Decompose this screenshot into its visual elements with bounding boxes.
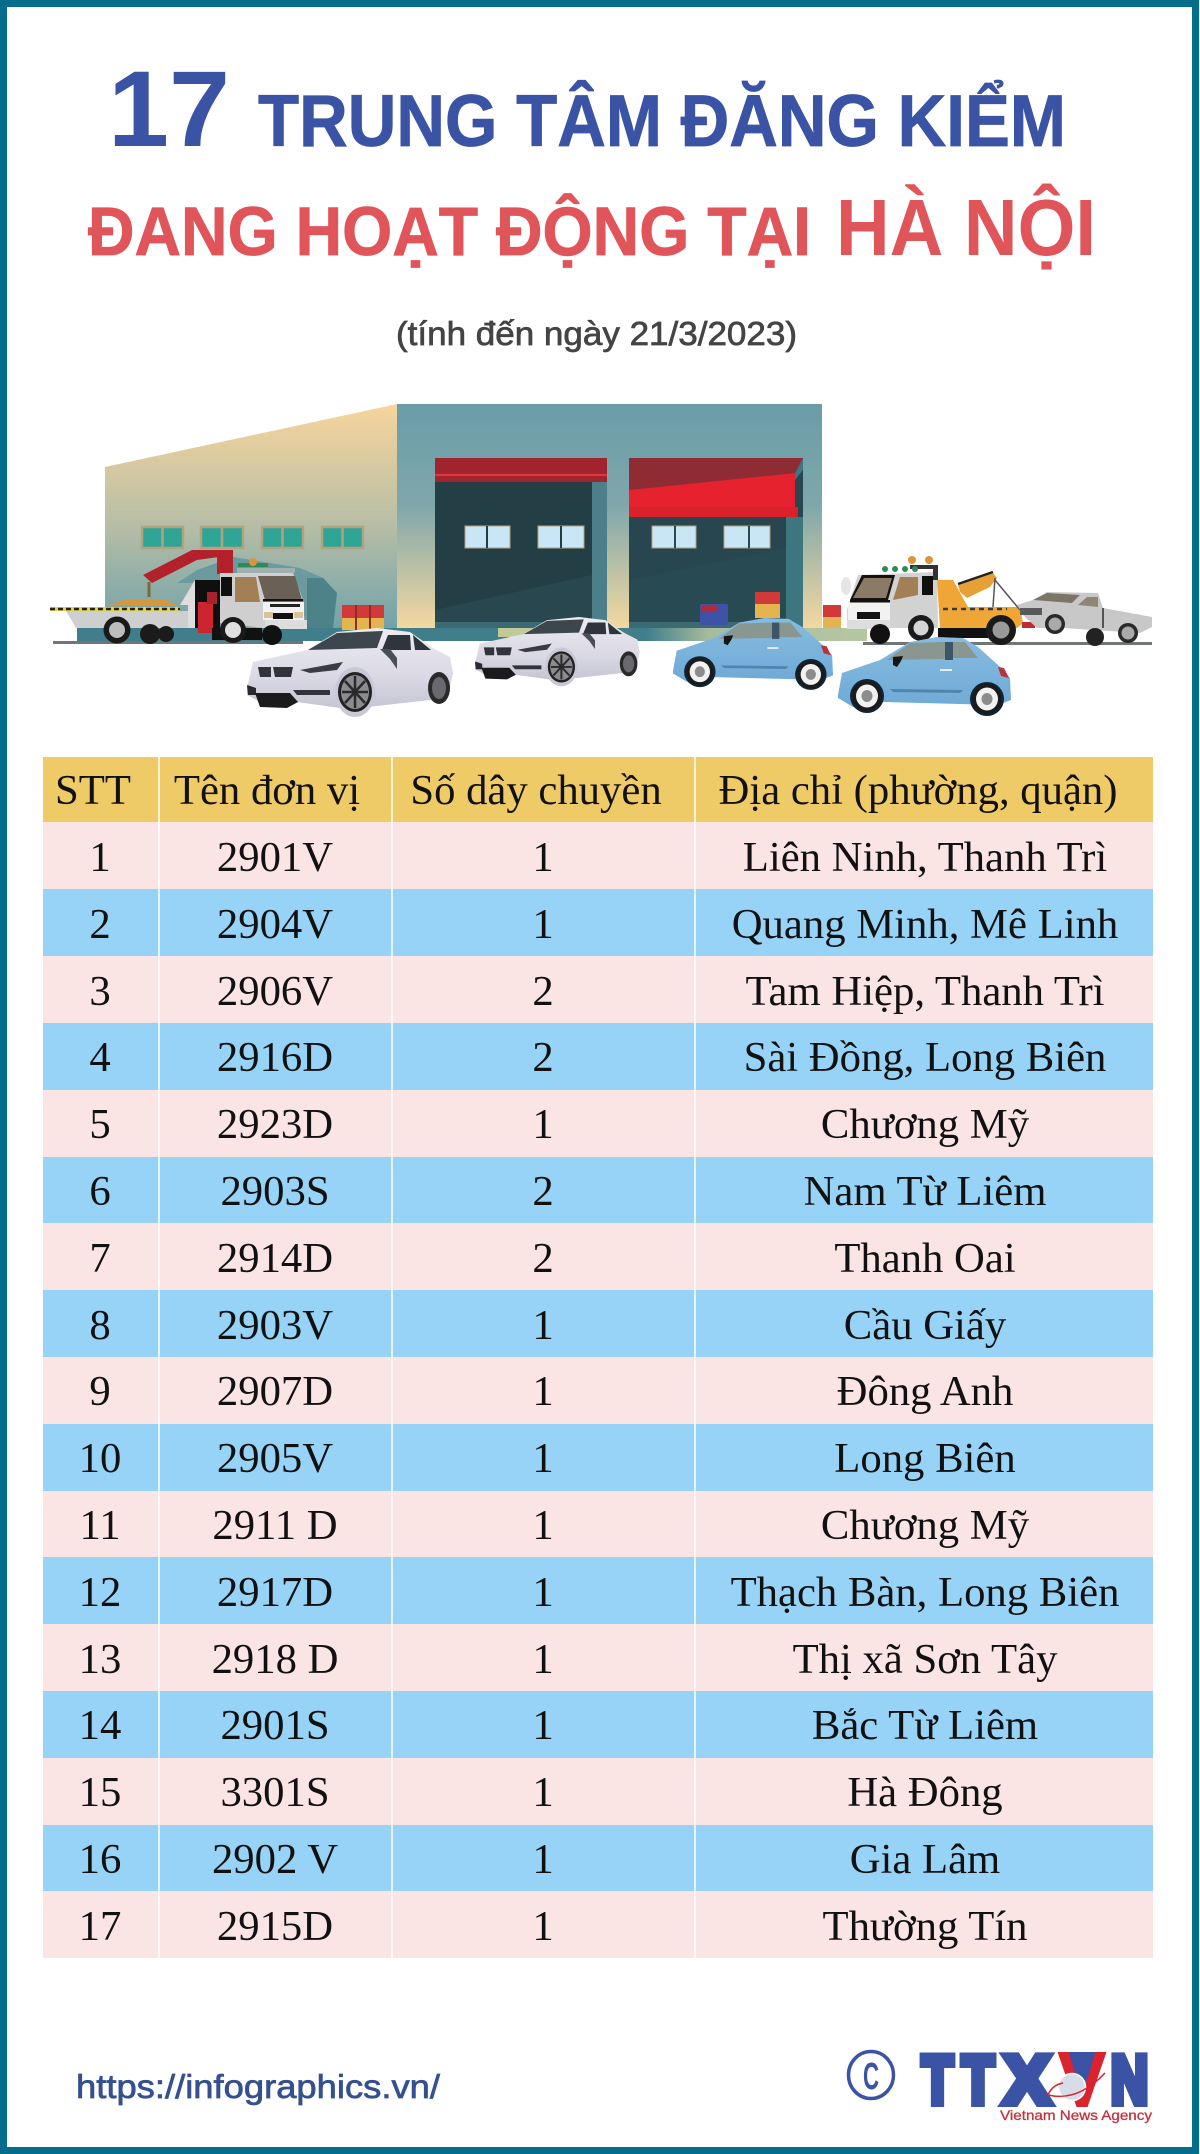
- table header: [43, 757, 1153, 822]
- row 5: 5: [89, 1101, 111, 1148]
- row 8: 1: [532, 1302, 554, 1349]
- row 6: [43, 1157, 1153, 1223]
- row 2: 2904V: [217, 901, 333, 948]
- row 4: [43, 1023, 1153, 1090]
- row 12: 1: [532, 1569, 554, 1616]
- row 9: [43, 1357, 1153, 1424]
- title line 2: đang hoạt động tại Hà Nội: HÀ NỘI: [836, 183, 1096, 272]
- table: inspection centres: [43, 757, 1153, 1958]
- row 3: 2: [532, 968, 554, 1015]
- source url: https://infographics.vn/: [76, 2068, 441, 2105]
- row 10: Long Biên: [834, 1435, 1016, 1482]
- row 12: Thạch Bàn, Long Biên: [731, 1569, 1119, 1616]
- row 2: 1: [532, 901, 554, 948]
- row 5: [43, 1090, 1153, 1157]
- row 3: 2906V: [217, 968, 333, 1015]
- row 2: [43, 889, 1153, 956]
- row 5: 2923D: [217, 1101, 333, 1148]
- row 15: 15: [79, 1769, 121, 1816]
- row 10: 10: [79, 1435, 121, 1482]
- blue car, back row: [673, 618, 833, 690]
- row 17: 1: [532, 1903, 554, 1950]
- row 17: 17: [79, 1903, 121, 1950]
- row 9: Đông Anh: [837, 1368, 1013, 1415]
- row 14: 14: [79, 1702, 121, 1749]
- title line 2: đang hoạt động tại Hà Nội: [88, 183, 1096, 272]
- row 12: 12: [79, 1569, 121, 1616]
- globe emblem: [1048, 2073, 1105, 2100]
- wordmark TTXVN: T: [922, 2042, 953, 2118]
- table header: Tên đơn vị: [174, 767, 360, 814]
- table header: Số dây chuyền: [410, 767, 662, 814]
- row 1: 1: [532, 834, 554, 881]
- title line 1: 17 trung tâm đăng kiểm: 17: [108, 48, 230, 169]
- row 13: 2918 D: [212, 1636, 338, 1683]
- row 4: 4: [89, 1034, 111, 1081]
- row 15: [43, 1758, 1153, 1825]
- row 17: Thường Tín: [822, 1903, 1028, 1950]
- subtitle: date: (tính đến ngày 21/3/2023): [396, 315, 797, 352]
- pickup being towed: [1017, 592, 1152, 646]
- row 11: Chương Mỹ: [821, 1502, 1030, 1549]
- row 13: 13: [79, 1636, 121, 1683]
- row 16: Gia Lâm: [850, 1836, 1000, 1883]
- row 9: 1: [532, 1368, 554, 1415]
- row 1: 1: [89, 834, 111, 881]
- row 17: [43, 1891, 1153, 1958]
- row 2: Quang Minh, Mê Linh: [732, 901, 1118, 948]
- title line 1: 17 trung tâm đăng kiểm: TRUNG TÂM ĐĂNG KIỂM: [258, 81, 1066, 162]
- row 10: 2905V: [217, 1435, 333, 1482]
- row 7: [43, 1223, 1153, 1290]
- row 14: 1: [532, 1702, 554, 1749]
- row 9: 2907D: [217, 1368, 333, 1415]
- row 8: 8: [89, 1302, 111, 1349]
- row 9: 9: [89, 1368, 111, 1415]
- row 5: 1: [532, 1101, 554, 1148]
- row 1: 2901V: [217, 834, 333, 881]
- logo: TTXVN copyright: [848, 2035, 1152, 2124]
- row 16: 1: [532, 1836, 554, 1883]
- row 8: [43, 1290, 1153, 1357]
- row 2: 2: [89, 901, 111, 948]
- row 3: 3: [89, 968, 111, 1015]
- row 16: 16: [79, 1836, 121, 1883]
- row 14: 2901S: [220, 1702, 330, 1749]
- right tow truck: [841, 556, 1152, 645]
- row 6: 6: [89, 1168, 111, 1215]
- row 16: 2902 V: [212, 1836, 338, 1883]
- row 12: 2917D: [217, 1569, 333, 1616]
- row 13: 1: [532, 1636, 554, 1683]
- row 11: [43, 1491, 1153, 1557]
- left tow truck with crane: [50, 550, 337, 645]
- row 15: Hà Đông: [847, 1769, 1003, 1816]
- row 5: Chương Mỹ: [821, 1101, 1030, 1148]
- title line 1: 17 trung tâm đăng kiểm: [108, 48, 1066, 169]
- illustration: inspection station with vehicles: [50, 404, 1152, 717]
- row 3: Tam Hiệp, Thanh Trì: [745, 968, 1105, 1015]
- copyright symbol: [848, 2052, 894, 2098]
- wordmark TTXVN: [922, 2035, 1148, 2124]
- copyright symbol: C: [863, 2056, 879, 2098]
- wordmark TTXVN: N: [1111, 2042, 1148, 2118]
- row 12: [43, 1557, 1153, 1624]
- row 7: 7: [89, 1235, 111, 1282]
- row 1: [43, 822, 1153, 889]
- row 17: 2915D: [217, 1903, 333, 1950]
- row 10: 1: [532, 1435, 554, 1482]
- title: [88, 48, 1096, 272]
- row 7: Thanh Oai: [834, 1235, 1016, 1282]
- row 6: 2: [532, 1168, 554, 1215]
- windows on side wall: [142, 527, 363, 548]
- row 6: Nam Từ Liêm: [804, 1168, 1046, 1215]
- row 4: 2916D: [217, 1034, 333, 1081]
- row 13: [43, 1624, 1153, 1691]
- table header: STT: [55, 767, 131, 814]
- row 6: 2903S: [220, 1168, 330, 1215]
- row 10: [43, 1424, 1153, 1491]
- row 14: Bắc Từ Liêm: [812, 1702, 1038, 1749]
- barrels and cart: [342, 592, 841, 630]
- row 3: [43, 956, 1153, 1023]
- silver car, back row: [475, 617, 640, 686]
- row 4: Sài Đồng, Long Biên: [744, 1034, 1106, 1081]
- table header: Địa chỉ (phường, quận): [719, 767, 1117, 814]
- wordmark TTXVN: V: [1057, 2035, 1107, 2124]
- building: [77, 404, 867, 641]
- row 13: Thị xã Sơn Tây: [793, 1636, 1058, 1683]
- row 14: [43, 1691, 1153, 1758]
- wordmark TTXVN: X: [1004, 2042, 1050, 2118]
- wordmark TTXVN: T: [962, 2042, 994, 2118]
- row 16: [43, 1825, 1153, 1891]
- left garage door: [435, 458, 607, 628]
- row 1: Liên Ninh, Thanh Trì: [743, 834, 1107, 881]
- row 15: 1: [532, 1769, 554, 1816]
- row 8: Cầu Giấy: [844, 1302, 1007, 1349]
- row 8: 2903V: [217, 1302, 333, 1349]
- row 11: 11: [79, 1502, 121, 1549]
- row 15: 3301S: [220, 1769, 330, 1816]
- row 7: 2914D: [217, 1235, 333, 1282]
- blue car, front row: [838, 637, 1011, 716]
- row 11: 2911 D: [212, 1502, 338, 1549]
- silver car, front row: [247, 628, 453, 717]
- right garage door: [629, 458, 803, 628]
- row 7: 2: [532, 1235, 554, 1282]
- title line 2: đang hoạt động tại Hà Nội: ĐANG HOẠT ĐỘNG TẠI: [88, 193, 811, 270]
- row 11: 1: [532, 1502, 554, 1549]
- tagline: Vietnam News Agency: [1000, 2107, 1152, 2123]
- row 4: 2: [532, 1034, 554, 1081]
